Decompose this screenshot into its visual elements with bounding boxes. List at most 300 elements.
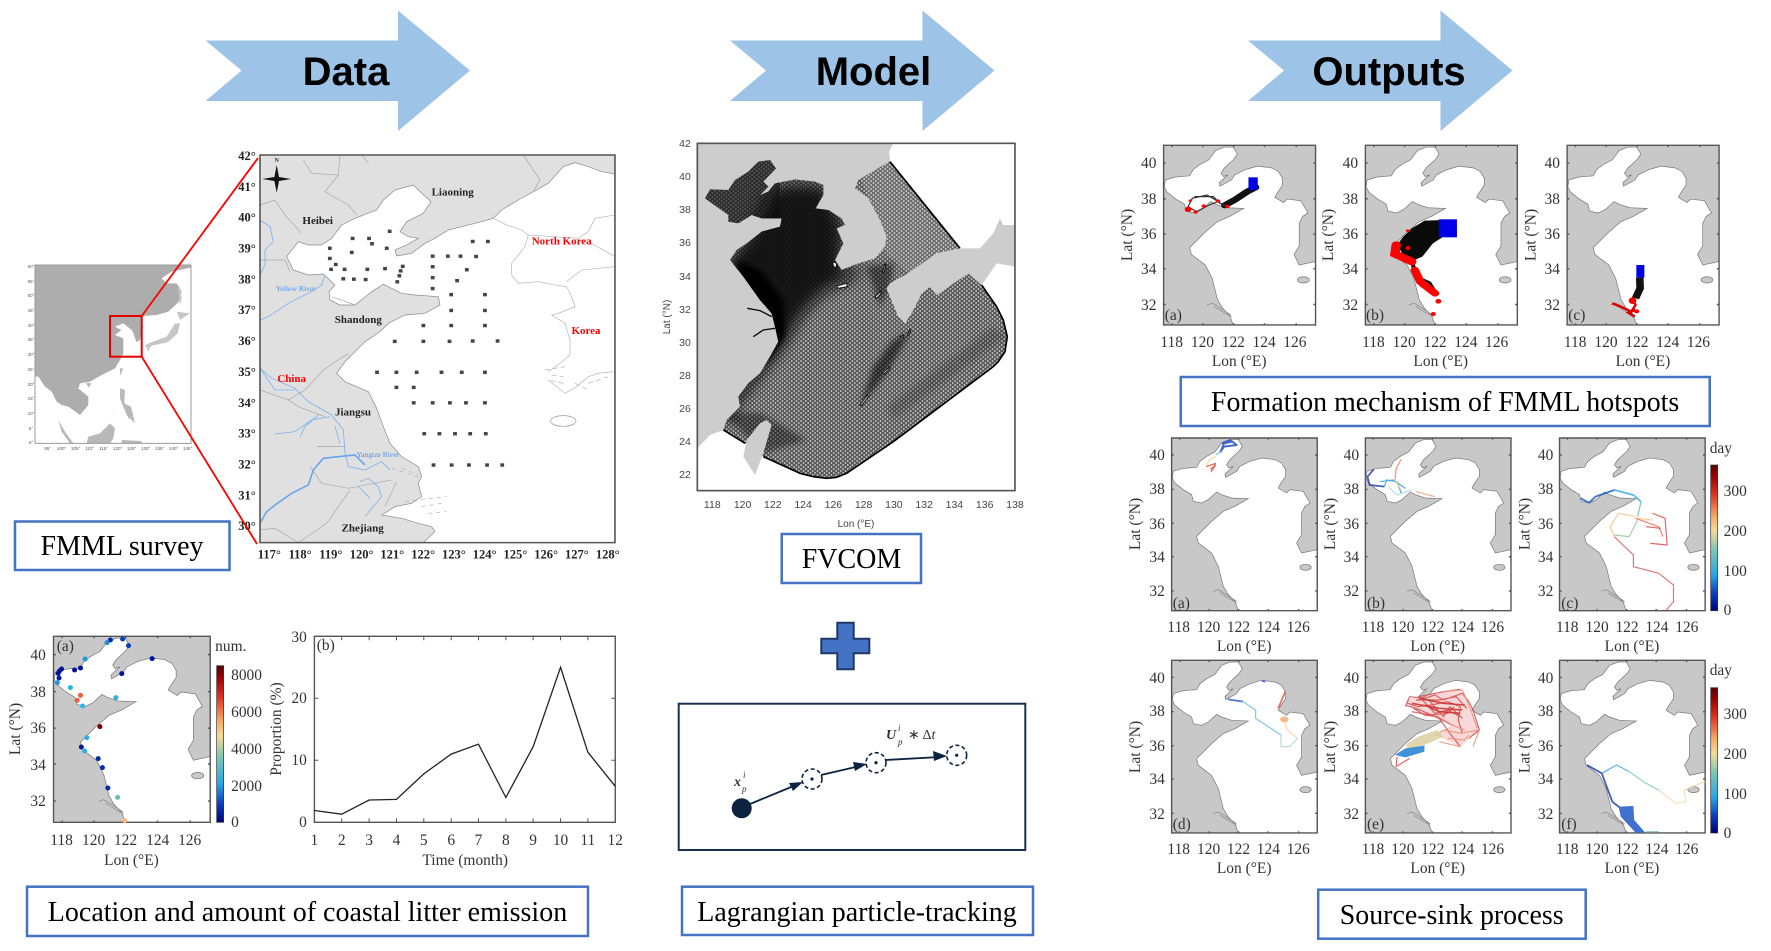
position label: x: [733, 775, 741, 790]
axis labels: 124: [1451, 619, 1474, 636]
panel (b): monthly proportion line chart: [268, 629, 623, 869]
unstructured mesh: [705, 160, 1006, 478]
mesh axis labels: 126: [825, 499, 842, 511]
axis labels: 38: [30, 684, 46, 701]
label: location and amount of coastal litter emission: [27, 887, 588, 936]
Jeju island: [551, 416, 576, 426]
axis labels: [7, 647, 202, 869]
axis labels: 30: [291, 629, 307, 646]
panel (b): monthly proportion line chart: (b): [317, 637, 335, 654]
inset tick labels: 125°: [127, 446, 137, 451]
axis labels: 36: [1344, 516, 1359, 533]
panel (f) trajectory: [1560, 660, 1705, 833]
mesh axis labels: 30: [679, 337, 691, 349]
compass: [262, 158, 291, 193]
day colorbar: 0: [1724, 825, 1732, 842]
axis labels: 1: [311, 832, 318, 849]
axis labels: 38: [1149, 481, 1165, 498]
mesh axis labels: 38: [679, 204, 691, 216]
inset tick labels: 10°: [28, 411, 35, 416]
axis labels: 120: [1393, 334, 1416, 351]
mesh axis labels: 28: [679, 370, 691, 382]
axis labels: 40: [1149, 670, 1165, 687]
axis labels: 120: [1391, 619, 1415, 636]
inset tick labels: 55°: [28, 279, 35, 284]
axis labels: 126: [1675, 841, 1699, 858]
panel (c) trajectory: [1560, 438, 1705, 611]
axis labels: 10: [291, 752, 307, 769]
axis labels: 34: [1538, 771, 1554, 788]
velocity label: p: [897, 737, 903, 747]
panel (a) trajectory: [1172, 438, 1317, 611]
mesh axis labels: [662, 138, 1024, 530]
latitude tick labels: 34°: [238, 396, 256, 410]
inset tick labels: 140°: [169, 446, 179, 451]
axis labels: Lon (°E): [1212, 353, 1267, 370]
mesh axis labels: 136: [976, 499, 994, 511]
axis labels: 11: [580, 832, 595, 849]
inset tick labels: 115°: [99, 446, 108, 451]
mesh axis labels: 124: [794, 499, 812, 511]
axis labels: 38: [1141, 191, 1157, 208]
map labels: Korea: [571, 325, 601, 337]
position label: i: [743, 770, 746, 780]
axis labels: 32: [1344, 806, 1359, 823]
longitude tick labels: 125°: [504, 548, 527, 562]
axis labels: Time (month): [422, 852, 508, 869]
main map: FMML survey stations: [238, 149, 620, 562]
axis labels: 38: [1545, 191, 1560, 208]
longitude tick labels: 128°: [596, 548, 620, 562]
axis labels: (b): [1367, 595, 1385, 612]
day colorbar: 100: [1724, 786, 1747, 803]
panel (d) trajectory: [1172, 660, 1317, 833]
axis labels: (d): [1173, 816, 1191, 833]
axis labels: 126: [1481, 619, 1504, 636]
axis labels: 122: [1222, 334, 1245, 351]
axis labels: 36: [1343, 226, 1358, 243]
axis labels: 118: [50, 832, 73, 849]
axis labels: 36: [1538, 738, 1554, 755]
arrow heading: Outputs: Outputs: [1312, 50, 1466, 94]
axis labels: 0: [299, 814, 307, 831]
axis labels: 124: [1451, 841, 1474, 858]
axis labels: 7: [475, 832, 483, 849]
velocity label: i: [898, 723, 901, 733]
axis labels: 36: [1149, 738, 1165, 755]
day colorbar: [1710, 440, 1747, 619]
axis labels: 40: [1538, 447, 1554, 464]
label: source-sink process: Source-sink process: [1340, 900, 1564, 931]
axis labels: Lon (°E): [1605, 638, 1659, 655]
axis labels: Lat (°N): [1522, 209, 1539, 261]
axis labels: 122: [114, 832, 137, 849]
axis labels: 124: [146, 832, 170, 849]
panel (a) hotspot: (a): [1165, 307, 1182, 324]
mesh axis labels: 36: [679, 237, 691, 249]
axis labels: 118: [1564, 334, 1587, 351]
label: FVCOM: [782, 534, 921, 583]
axis labels: 126: [1675, 619, 1699, 636]
inset tick labels: 110°: [85, 446, 94, 451]
latitude tick labels: 35°: [238, 365, 256, 379]
axis labels: 124: [1257, 619, 1280, 636]
longitude tick labels: [258, 548, 620, 562]
label: FMML survey: FMML survey: [40, 531, 204, 562]
axis labels: 122: [1227, 841, 1250, 858]
emission colorbar: 2000: [231, 778, 262, 795]
longitude tick labels: 124°: [473, 548, 496, 562]
mesh axis labels: 32: [679, 304, 691, 316]
axis labels: 32: [1343, 297, 1358, 314]
emission colorbar: 6000: [231, 704, 262, 721]
estuary inlets: [747, 308, 775, 337]
velocity label: ∗ Δt: [908, 728, 936, 743]
axis labels: 122: [1421, 841, 1444, 858]
map labels: [276, 186, 601, 534]
axis labels: 32: [1538, 583, 1553, 600]
axis labels: Lon (°E): [1413, 353, 1468, 370]
panel (b) trajectory: [1365, 438, 1511, 611]
map labels: Zhejiang: [342, 522, 384, 534]
axis labels: (a): [1173, 595, 1190, 612]
day colorbar: 300: [1724, 706, 1747, 723]
axis labels: 34: [1149, 771, 1165, 788]
label: FMML survey: [15, 522, 230, 570]
axis labels: 122: [1421, 619, 1444, 636]
axis labels: 122: [1625, 334, 1648, 351]
arrow heading: Data: [206, 10, 470, 131]
inset tick labels: 20°: [28, 382, 35, 387]
Lagrangian particle-tracking diagram: [679, 704, 1025, 850]
red zoom connector lines: [142, 158, 258, 544]
axis labels: 126: [1687, 334, 1710, 351]
panel (c) hotspot: [1567, 145, 1719, 325]
label: source-sink process: [1318, 890, 1586, 939]
axis labels: Lon (°E): [1616, 353, 1670, 370]
axis labels: 38: [1344, 703, 1359, 720]
inset tick labels: 135°: [155, 446, 165, 451]
axis labels: 8: [502, 832, 510, 849]
axis labels: 34: [1343, 261, 1358, 278]
axis labels: 40: [1538, 670, 1554, 687]
axis labels: 12: [608, 832, 623, 849]
panel (e) trajectory: [1365, 660, 1511, 833]
label: formation mechanism of FMML hotspots: Formation mechanism of FMML hotspots: [1211, 387, 1679, 418]
day colorbar: 300: [1724, 483, 1747, 500]
map labels: China: [277, 373, 307, 385]
inset tick labels: [28, 264, 193, 451]
longitude tick labels: 119°: [319, 548, 342, 562]
longitude tick labels: 118°: [289, 548, 312, 562]
axis labels: 32: [1538, 806, 1553, 823]
emission colorbar: num.: [215, 638, 246, 655]
mesh axis labels: 24: [679, 436, 691, 448]
panel (a): coastal litter emission map: [7, 636, 210, 869]
axis labels: 38: [1344, 481, 1359, 498]
axis labels: Lon (°E): [1410, 860, 1465, 877]
axis labels: 34: [1149, 549, 1165, 566]
inset tick labels: 15°: [28, 396, 35, 401]
mesh axis labels: 128: [855, 499, 873, 511]
axis labels: 118: [1556, 841, 1579, 858]
compass: N: [275, 158, 280, 164]
map labels: Heibei: [302, 215, 333, 227]
rivers: [260, 220, 390, 517]
panel (b) hotspot: (b): [1366, 307, 1384, 324]
axis labels: 32: [1149, 806, 1165, 823]
FVCOM mesh map: [662, 138, 1024, 530]
axis labels: 2: [338, 832, 346, 849]
axis labels: 34: [30, 757, 46, 774]
mesh axis labels: 40: [679, 171, 691, 183]
longitude tick labels: 120°: [350, 548, 373, 562]
inset tick labels: 60°: [28, 264, 35, 269]
label: Lagrangian particle-tracking: [682, 887, 1033, 935]
axis labels: (e): [1367, 816, 1384, 833]
axis labels: 126: [1283, 334, 1307, 351]
axis labels: 124: [1645, 619, 1669, 636]
day colorbar: day: [1710, 662, 1732, 679]
axis labels: 126: [178, 832, 202, 849]
axis labels: 120: [1586, 841, 1609, 858]
axis labels: Lat (°N): [1516, 721, 1533, 773]
panel (a): coastal litter emission map: (a): [57, 638, 74, 655]
panels: source-sink trajectories, first row: [1127, 438, 1747, 655]
axis labels: 120: [1391, 841, 1415, 858]
arrow heading: Data: Data: [303, 50, 390, 94]
latitude tick labels: 31°: [238, 488, 256, 502]
map labels: Yellow River: [276, 284, 316, 293]
axis labels: 34: [1344, 771, 1359, 788]
survey stations: [328, 230, 504, 467]
day colorbar: day: [1710, 440, 1732, 457]
axis labels: 126: [1287, 619, 1310, 636]
axis labels: 34: [1141, 261, 1157, 278]
panel (c) hotspot: (c): [1568, 307, 1585, 324]
latitude tick labels: 38°: [238, 272, 256, 286]
axis labels: 38: [1538, 481, 1554, 498]
axis labels: Proportion (%): [268, 682, 285, 776]
day colorbar: 200: [1724, 746, 1747, 763]
axis labels: 126: [1287, 841, 1310, 858]
mesh axis labels: 26: [679, 403, 691, 415]
mesh axis labels: 120: [734, 499, 752, 511]
axis labels: Lon (°E): [1217, 638, 1272, 655]
inset tick labels: 120°: [113, 446, 123, 451]
label: FVCOM: FVCOM: [802, 544, 901, 575]
axis labels: 120: [1197, 619, 1220, 636]
arrow heading: Model: Model: [816, 50, 931, 94]
land: [697, 143, 893, 448]
axis labels: 32: [1344, 583, 1359, 600]
latitude tick labels: [238, 149, 256, 533]
axis labels: 40: [1344, 670, 1359, 687]
axis labels: Lat (°N): [1322, 721, 1339, 773]
inset tick labels: 45°: [28, 308, 35, 313]
axis labels: 122: [1227, 619, 1250, 636]
axis labels: 10: [553, 832, 569, 849]
axis labels: 34: [1538, 549, 1554, 566]
longitude tick labels: 121°: [380, 548, 404, 562]
day colorbar: 100: [1724, 563, 1747, 580]
axis labels: 38: [1343, 191, 1358, 208]
axis labels: 40: [1344, 447, 1359, 464]
axis labels: 120: [1191, 334, 1214, 351]
day colorbar: 0: [1724, 602, 1732, 619]
axis labels: 118: [1362, 619, 1385, 636]
inset tick labels: 145°: [183, 446, 193, 451]
axis labels: 118: [1167, 841, 1190, 858]
inset tick labels: 25°: [28, 367, 35, 372]
emission colorbar: [215, 638, 262, 831]
longitude tick labels: 117°: [258, 548, 281, 562]
latitude tick labels: 36°: [238, 334, 256, 348]
emission points: [55, 636, 155, 823]
axis labels: 126: [1481, 841, 1504, 858]
axis labels: 4: [393, 832, 401, 849]
axis labels: 40: [30, 647, 46, 664]
longitude tick labels: 127°: [565, 548, 589, 562]
label: formation mechanism of FMML hotspots: [1181, 377, 1710, 426]
axis labels: 126: [1485, 334, 1508, 351]
axis labels: 40: [1343, 155, 1358, 172]
inset tick labels: 95°: [44, 446, 51, 451]
axis labels: Lon (°E): [104, 852, 159, 869]
position label: p: [741, 784, 747, 794]
latitude tick labels: 32°: [238, 458, 256, 472]
axis labels: 36: [1344, 738, 1359, 755]
axis labels: 32: [30, 793, 46, 810]
axis labels: Lat (°N): [7, 703, 24, 755]
axis labels: 124: [1454, 334, 1478, 351]
axis labels: 34: [1344, 549, 1359, 566]
axis labels: 32: [1545, 297, 1560, 314]
axis labels: 118: [1362, 334, 1385, 351]
mesh axis labels: 122: [764, 499, 782, 511]
axis labels: 3: [365, 832, 373, 849]
axis labels: 118: [1167, 619, 1190, 636]
icon: plus sign: [821, 623, 869, 669]
inset tick labels: 40°: [28, 323, 35, 328]
mesh axis labels: 138: [1006, 499, 1024, 511]
emission colorbar: 0: [231, 814, 239, 831]
panel (b) hotspot: [1365, 145, 1517, 325]
map labels: Liaoning: [432, 186, 474, 198]
mesh axis labels: 42: [679, 138, 691, 150]
inset tick labels: 35°: [28, 337, 35, 342]
axis labels: (f): [1561, 816, 1577, 833]
position label: [733, 770, 747, 794]
axis labels: Lon (°E): [1217, 860, 1272, 877]
label: Lagrangian particle-tracking: Lagrangian particle-tracking: [697, 897, 1017, 928]
axis labels: 34: [1545, 261, 1560, 278]
displaced particles: [802, 745, 967, 789]
inset map: East Asia overview: [28, 264, 193, 451]
axis labels: Lat (°N): [1516, 498, 1533, 550]
axis labels: 120: [1586, 619, 1609, 636]
mesh axis labels: 118: [704, 499, 721, 511]
axis labels: 124: [1257, 841, 1280, 858]
axis labels: 124: [1656, 334, 1680, 351]
axis labels: Lat (°N): [1127, 498, 1144, 550]
map labels: North Korea: [532, 236, 592, 248]
mesh axis labels: 34: [679, 271, 691, 283]
islands: [833, 262, 911, 406]
mesh axis labels: 134: [946, 499, 963, 511]
velocity label: [886, 723, 936, 747]
axis labels: 38: [1538, 703, 1554, 720]
inset tick labels: 50°: [28, 293, 35, 298]
arrow heading: Model: [730, 10, 994, 131]
day colorbar: [1710, 662, 1747, 842]
longitude tick labels: 126°: [534, 548, 558, 562]
label: location and amount of coastal litter emission: Location and amount of coastal litter emission: [48, 897, 567, 928]
axis labels: 124: [1645, 841, 1669, 858]
inset tick labels: 0°: [29, 440, 33, 445]
Korea outlines and borders: [493, 215, 615, 393]
axis labels: Lon (°E): [1410, 638, 1465, 655]
axis labels: Lat (°N): [1322, 498, 1339, 550]
start particle: [732, 798, 752, 818]
axis labels: [1119, 155, 1710, 370]
axis labels: 32: [1141, 297, 1156, 314]
axis labels: 40: [1545, 155, 1560, 172]
latitude tick labels: 33°: [238, 427, 256, 441]
mesh axis labels: 130: [885, 499, 903, 511]
emission colorbar: 4000: [231, 741, 262, 758]
inset tick labels: 30°: [28, 352, 35, 357]
axis labels: [268, 629, 623, 869]
axis labels: 120: [1197, 841, 1220, 858]
axis labels: Lat (°N): [1119, 209, 1136, 261]
axis labels: 122: [1423, 334, 1447, 351]
axis labels: 118: [1160, 334, 1183, 351]
longitude tick labels: 122°: [411, 548, 435, 562]
axis labels: 122: [1615, 619, 1639, 636]
mesh axis labels: 132: [915, 499, 933, 511]
inset tick labels: 5°: [29, 426, 33, 431]
axis labels: 20: [291, 690, 307, 707]
panel (a) hotspot: [1164, 145, 1316, 325]
axis labels: 9: [529, 832, 537, 849]
latitude tick labels: 42°: [238, 149, 256, 163]
mesh axis labels: Lon (°E): [838, 519, 874, 530]
map labels: Jiangsu: [335, 406, 371, 418]
axis labels: 120: [1594, 334, 1618, 351]
emission colorbar: 8000: [231, 667, 262, 684]
axis labels: 40: [1141, 155, 1157, 172]
axis labels: 36: [1545, 226, 1560, 243]
axis labels: Lon (°E): [1605, 860, 1659, 877]
mesh axis labels: Lat (°N): [662, 300, 673, 334]
axis labels: 38: [1149, 703, 1165, 720]
displacement arrows: [750, 751, 947, 804]
map labels: Yangtze River: [357, 450, 400, 459]
Taiwan, Kyushu and Japan land: [743, 218, 1015, 475]
data line: [314, 667, 615, 814]
latitude tick labels: 41°: [238, 180, 256, 194]
inset tick labels: 130°: [141, 446, 151, 451]
axis labels: Lat (°N): [1320, 209, 1337, 261]
provincial borders: [260, 155, 540, 543]
axis labels: 40: [1149, 447, 1165, 464]
inset tick labels: 100°: [57, 446, 67, 451]
axis labels: [1127, 447, 1699, 655]
axis labels: (c): [1561, 595, 1578, 612]
red study-area box: [110, 316, 142, 357]
day colorbar: 200: [1724, 523, 1747, 540]
